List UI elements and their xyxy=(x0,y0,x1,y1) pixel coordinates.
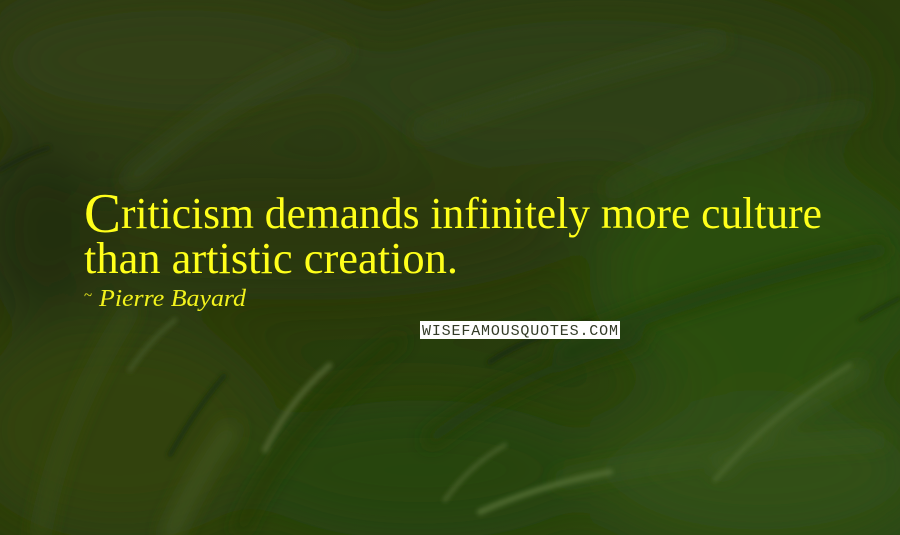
quote text xyxy=(84,183,822,283)
author name: Pierre Bayard xyxy=(98,286,247,312)
attribution xyxy=(84,286,247,312)
watermark badge: WISEFAMOUSQUOTES.COM xyxy=(422,323,618,340)
quote line 1: riticism demands infinitely more culture xyxy=(121,189,822,238)
quote line 2: than artistic creation. xyxy=(84,234,458,283)
tilde: ~ xyxy=(84,288,92,304)
quote line 1: C xyxy=(84,183,121,245)
